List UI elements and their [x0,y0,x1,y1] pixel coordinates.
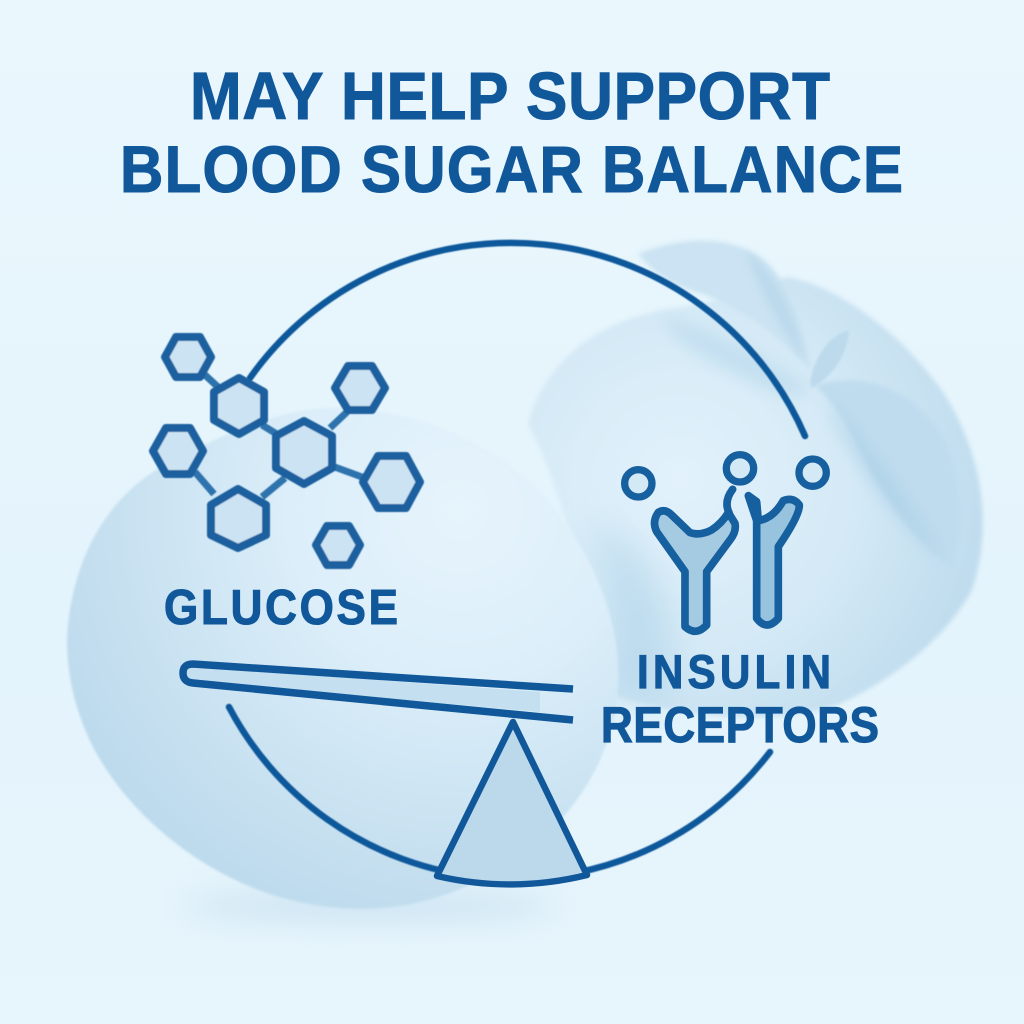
glucose molecule icon [153,337,420,565]
cast shadow from left apple [590,520,672,704]
title line 2: BLOOD SUGAR BALANCE [120,133,903,207]
seesaw balance [183,664,587,884]
beam fill [186,666,540,712]
glucose circles [625,455,826,497]
right receptor [748,496,799,625]
molecule bonds [195,375,362,497]
top leaf [638,241,812,372]
left apple [67,408,618,909]
title line 1: MAY HELP SUPPORT [190,59,830,134]
glucose label: GLUCOSE [164,580,398,635]
lower arc [229,707,770,879]
balance circle arc [229,243,805,879]
apple body [528,277,983,717]
label line 1: INSULIN [637,646,831,699]
left receptor broken tip [727,489,733,513]
left receptor [655,489,735,631]
small leaf [810,330,849,388]
apple dimple shading [660,316,812,395]
fulcrum triangle [437,722,587,884]
beam outline [183,664,573,720]
insulin receptors icon [625,455,826,631]
apples illustration [67,241,983,920]
upper arc [250,243,805,436]
insulin receptors label [601,646,879,753]
top leaf fold shading [745,250,806,362]
leaf shading [825,400,945,560]
ground shadow [180,892,560,920]
left receptor body [655,511,735,631]
right apple [528,241,983,717]
hexagon atoms [153,337,420,565]
label line 2: RECEPTORS [601,698,879,753]
title [120,59,903,207]
large leaf [815,380,961,568]
